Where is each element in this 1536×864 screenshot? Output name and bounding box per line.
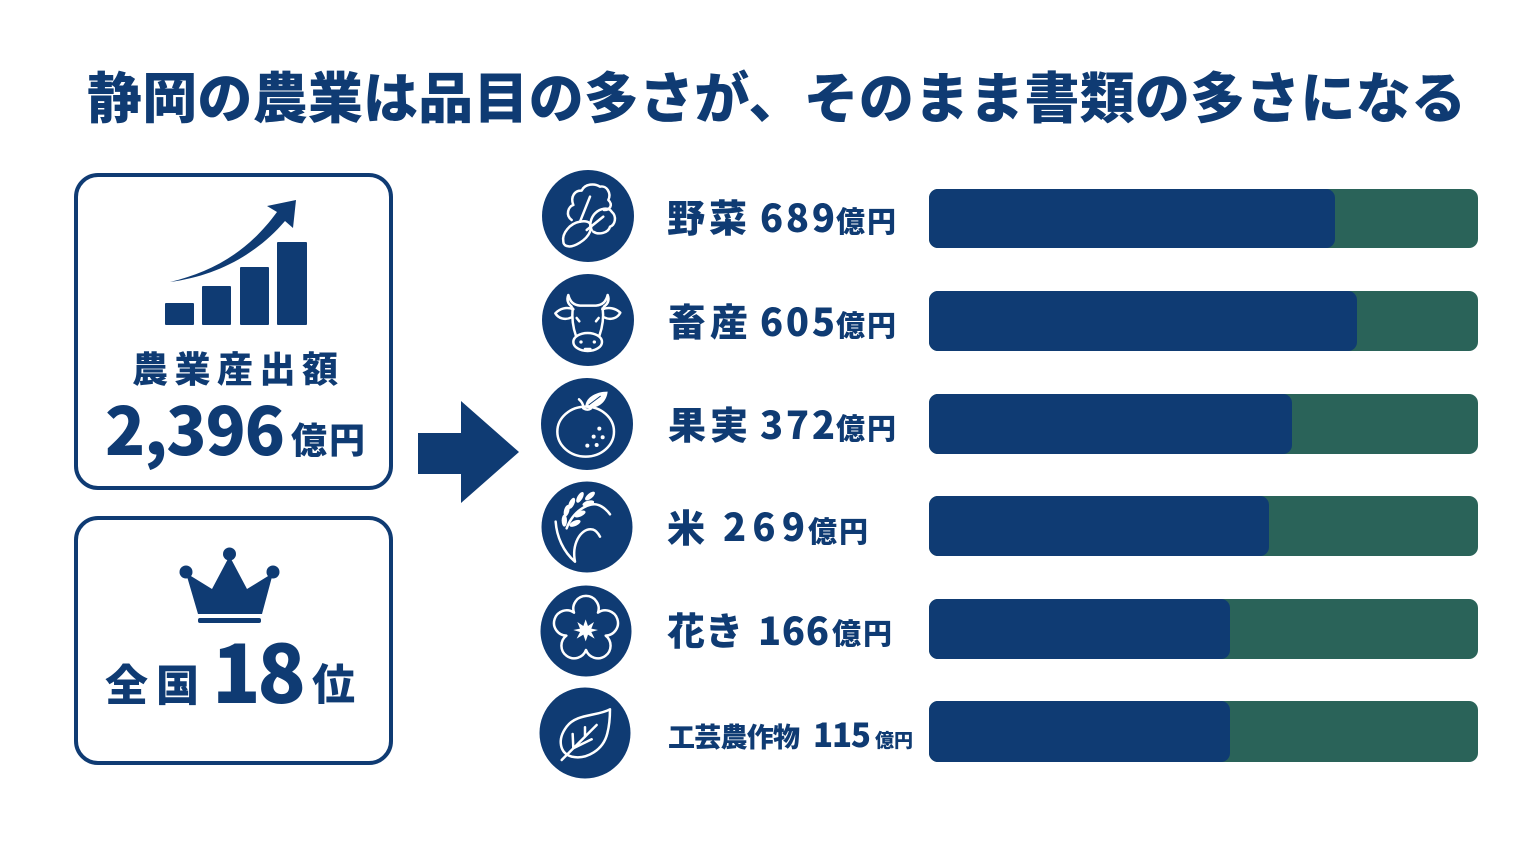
rank text: 18 [212,611,306,727]
icon: crown [180,548,280,623]
label: 畜産 [668,292,748,347]
bar [929,291,1478,351]
row: industrial crops [540,688,1478,778]
icon: flower [540,586,632,676]
value: 億円 [836,303,896,345]
value [760,395,896,450]
bar [929,701,1478,762]
label: 農業産出額: 農業産出額 [132,341,338,393]
value [760,188,896,243]
rank text: 全国 [105,652,199,714]
value: 億円 [836,199,896,241]
row: flowers [540,586,1478,676]
value: 億円 [875,726,913,753]
icon: cow [542,274,634,366]
label: 工芸農作物 [668,716,800,755]
label: 米 [667,498,705,553]
value: 億円 [808,509,868,551]
value [760,292,896,347]
value [758,601,892,656]
row: rice [542,482,1478,572]
rank text: 位 [312,651,355,713]
value [813,709,913,757]
value: 2,396億円 [105,379,365,475]
value: 689 [760,188,835,243]
value: 166 [758,601,829,656]
value: 115 [813,709,871,757]
icon: rice [542,482,632,572]
value: 2,396億円: 億円 [291,412,365,464]
value: 269 [723,497,805,552]
label: 花き [667,601,743,656]
icon: rising bar chart [165,200,307,325]
value: 億円 [832,611,892,653]
bar [929,394,1478,454]
label: 野菜 [667,188,747,243]
icon: leaf [540,688,630,778]
panel: national rank [76,518,391,763]
value: 605 [760,292,835,347]
panel: agricultural output [76,175,391,488]
row: vegetables [542,170,1478,262]
title: 静岡の農業は品目の多さが、そのまま書類の多さになる [87,54,1466,134]
value [723,497,868,552]
icon: fruit [541,378,633,470]
row: fruit [541,378,1478,470]
row: livestock [542,274,1478,366]
value: 億円 [836,406,896,448]
bar [929,189,1478,248]
icon: vegetables [542,170,634,262]
value: 372 [760,395,835,450]
bar [929,599,1478,659]
label: 果実 [668,395,748,450]
arrow [418,401,519,503]
bar [929,496,1478,556]
value: 2,396億円: 2,396 [105,379,285,475]
rank text [105,611,355,727]
